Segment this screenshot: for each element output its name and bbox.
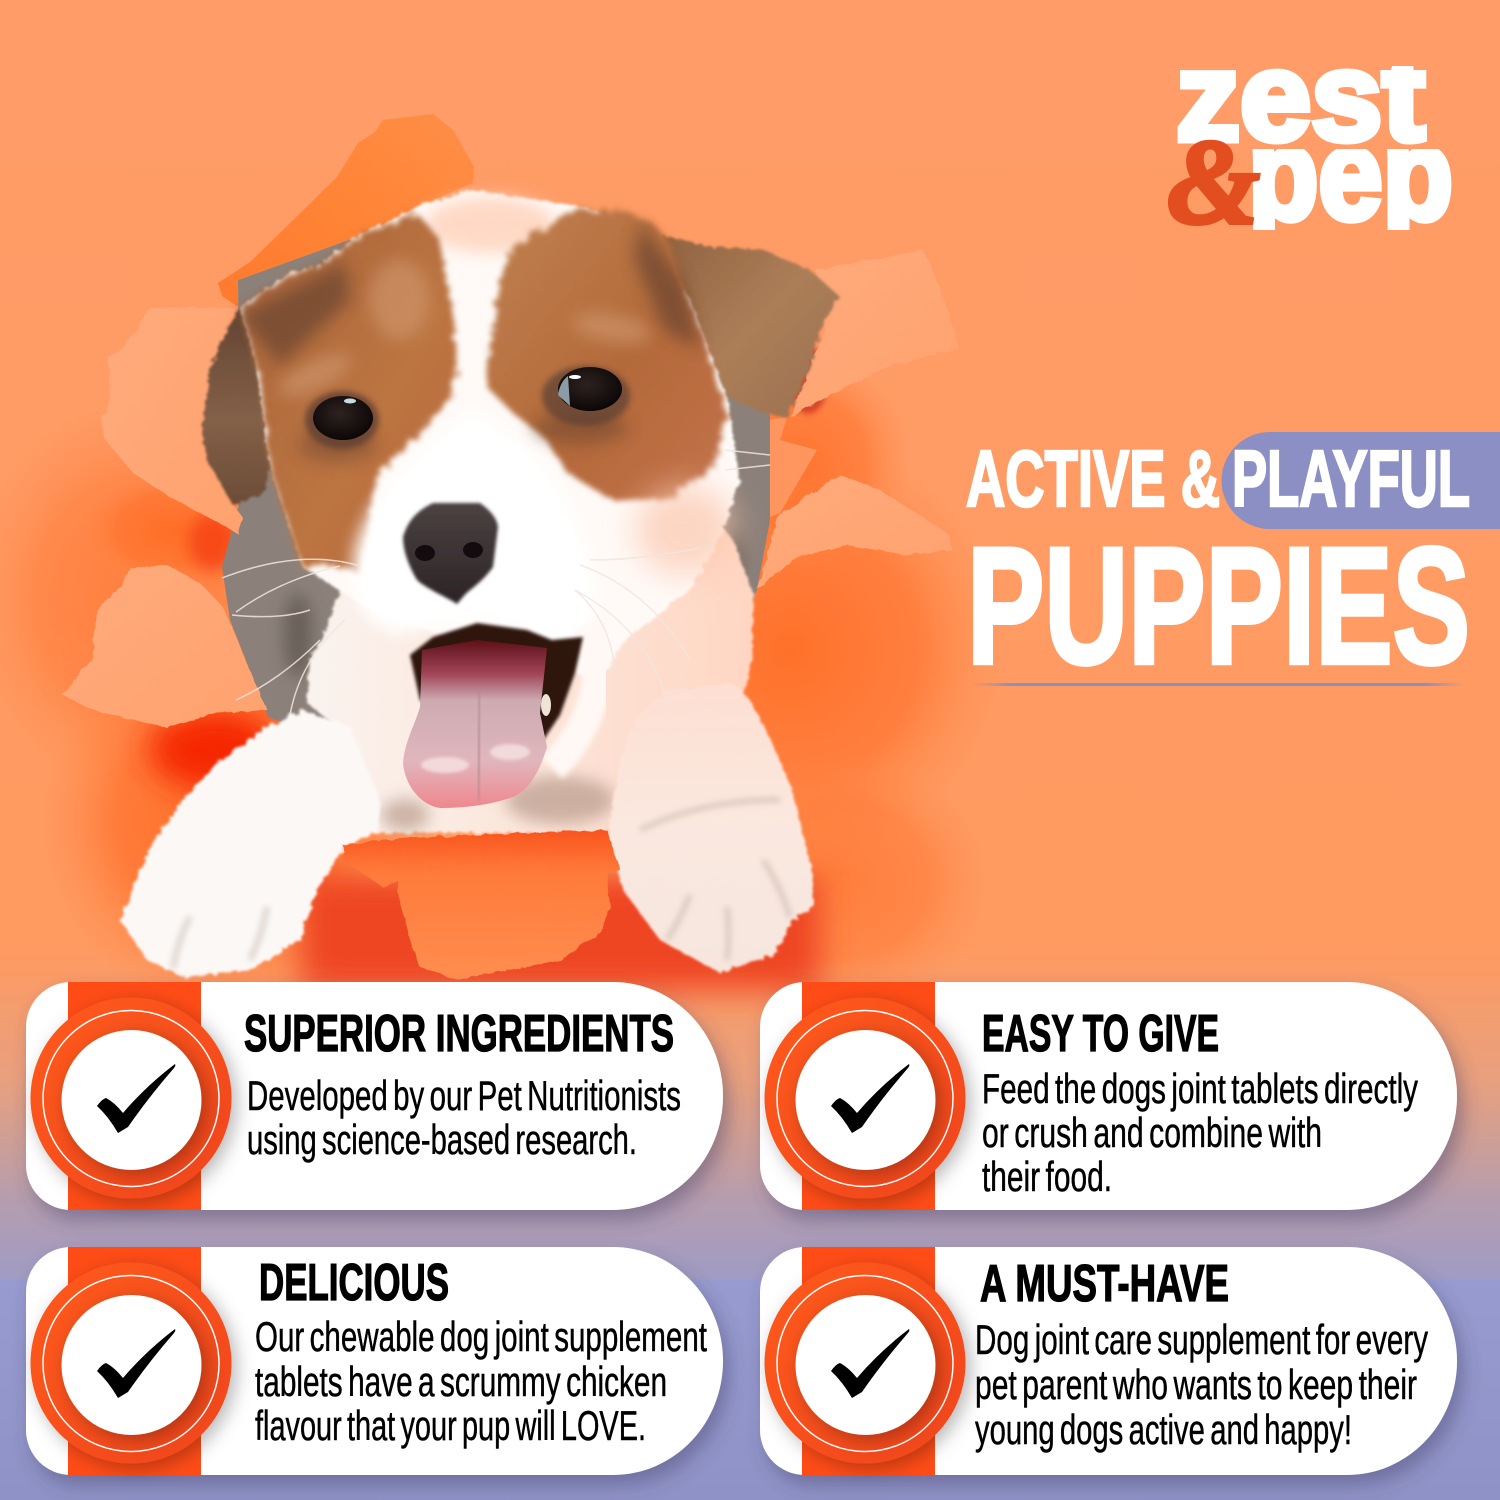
fur highlights	[273, 260, 654, 405]
pill highlight	[1222, 432, 1500, 529]
flap: left	[102, 307, 242, 533]
forehead peach tint	[425, 197, 555, 253]
head	[240, 190, 740, 680]
heading: EASY TO GIVE	[982, 1005, 1219, 1063]
brand logo	[1168, 66, 1452, 230]
head fur: right brown patch	[487, 210, 727, 500]
paw shading	[173, 800, 790, 968]
card: easy to give	[760, 982, 1457, 1210]
tongue groove and highlights	[421, 690, 530, 800]
grey interior of hole	[222, 237, 770, 730]
neck peach tint	[635, 485, 735, 575]
check badge	[30, 1262, 232, 1464]
description: using science-based research.	[247, 1116, 637, 1163]
description: Developed by our Pet Nutritionists	[247, 1072, 681, 1119]
dark fur shadow on hole	[284, 527, 743, 677]
lower lip ring	[552, 625, 597, 768]
orange band	[68, 1247, 201, 1475]
right paw	[607, 683, 813, 973]
orange band	[68, 982, 201, 1210]
left eye	[305, 391, 379, 449]
saturated glow around hole	[0, 346, 1005, 1010]
logo word zest: zest	[1176, 28, 1425, 167]
torn paper hole	[0, 114, 1005, 1010]
check badge	[30, 998, 232, 1198]
description: their food.	[982, 1153, 1112, 1200]
underline	[972, 683, 1465, 686]
right ear	[662, 236, 840, 417]
heading line: active &: ACTIVE &	[966, 434, 1220, 523]
head fur: left brown patch	[240, 213, 457, 573]
dark fur accents	[240, 222, 700, 463]
flap: lower right	[757, 475, 953, 590]
body	[307, 500, 753, 833]
description: Our chewable dog joint supplement	[255, 1313, 707, 1360]
description: flavour that your pup will LOVE.	[255, 1402, 646, 1449]
puppy illustration	[120, 190, 840, 977]
flap: upper right	[790, 250, 960, 417]
bottom paper flap	[343, 830, 620, 980]
card body	[26, 1247, 723, 1475]
description: or crush and combine with	[982, 1109, 1322, 1156]
card: a must-have	[760, 1247, 1457, 1475]
card: delicious	[26, 1247, 723, 1475]
heading: DELICIOUS	[259, 1254, 449, 1312]
left paw	[120, 710, 380, 977]
teeth	[541, 694, 551, 716]
logo ampersand: &	[1167, 115, 1260, 250]
flap: middle right sliver	[770, 417, 817, 517]
orange band	[802, 982, 935, 1210]
right eye	[542, 366, 630, 426]
card body	[760, 982, 1457, 1210]
heading: SUPERIOR INGREDIENTS	[244, 1005, 674, 1063]
flap: lower left	[62, 565, 267, 728]
logo word pep: pep	[1248, 101, 1453, 247]
check badge	[764, 1262, 966, 1464]
check badge	[764, 998, 966, 1198]
heading: A MUST-HAVE	[980, 1255, 1229, 1313]
whiskers	[222, 450, 770, 715]
tongue	[403, 640, 547, 808]
muzzle	[353, 410, 595, 650]
description: tablets have a scrummy chicken	[255, 1358, 667, 1405]
orange band	[802, 1247, 935, 1475]
card body	[26, 982, 723, 1210]
nose	[403, 503, 498, 604]
left ear	[202, 290, 280, 505]
card body	[760, 1247, 1457, 1475]
open mouth	[410, 623, 583, 760]
headline	[966, 432, 1500, 699]
flap: top	[218, 114, 474, 307]
card: superior ingredients	[26, 982, 723, 1210]
chest shading	[381, 776, 615, 831]
